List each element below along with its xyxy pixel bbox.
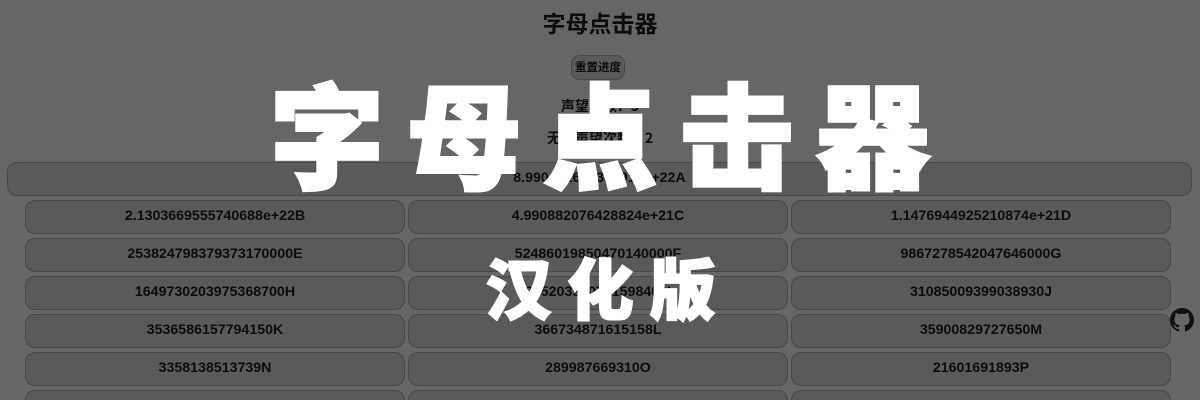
subtitle: 汉化版: 汉 <box>486 238 552 334</box>
letter G button: 9867278542047646000G <box>901 246 1061 262</box>
letter I button <box>408 276 788 310</box>
main title: 字母点击器 <box>270 48 932 213</box>
letter P button <box>791 352 1171 386</box>
partial bottom row button 3 <box>791 390 1171 400</box>
letter K button: 3536586157794150K <box>147 322 283 338</box>
letter P button: 21601691893P <box>933 360 1029 376</box>
letter M button <box>791 314 1171 348</box>
main title: 字母点击器: 字 <box>270 48 384 213</box>
letter I button: 245203950701598400I <box>525 284 671 300</box>
letter D button: 1.1476944925210874e+21D <box>891 208 1071 224</box>
letter M button: 35900829727650M <box>920 322 1042 338</box>
letter H button: 1649730203975368700H <box>135 284 295 300</box>
main title: 字母点击器: 器 <box>816 48 930 213</box>
letter D button <box>791 200 1171 234</box>
letter K button <box>25 314 405 348</box>
letter H button <box>25 276 405 310</box>
letter L button <box>408 314 788 348</box>
letter C button: 4.990882076428824e+21C <box>512 208 684 224</box>
letter N button: 3358138513739N <box>159 360 271 376</box>
letter buttons grid <box>25 200 1171 400</box>
letter F button <box>408 238 788 272</box>
partial bottom row button 2 <box>408 390 788 400</box>
main title: 字母点击器: 点 <box>543 48 657 213</box>
letter J button: 31085009399038930J <box>910 284 1052 300</box>
page heading: 字母点击器 <box>542 5 658 39</box>
letter F button: 52486019850470140000F <box>515 246 681 262</box>
subtitle: 汉化版: 化 <box>568 238 634 334</box>
subtitle: 汉化版: 版 <box>650 238 716 334</box>
main title: 字母点击器: 母 <box>407 48 521 213</box>
letter O button <box>408 352 788 386</box>
letter E button: 253824798379373170000E <box>127 246 303 262</box>
letter C button <box>408 200 788 234</box>
letter O button: 289987669310O <box>545 360 651 376</box>
letter B button: 2.1303669555740688e+22B <box>125 208 305 224</box>
letter E button <box>25 238 405 272</box>
letter J button <box>791 276 1171 310</box>
icon: github <box>1170 308 1194 332</box>
partial bottom row button 1 <box>25 390 405 400</box>
letter L button: 366734871615158L <box>534 322 662 338</box>
reset progress button <box>571 55 625 80</box>
prestige count: 声望次数：5 <box>561 96 639 116</box>
letter G button <box>791 238 1171 272</box>
main title: 字母点击器: 击 <box>680 48 794 213</box>
reset progress button: 重置进度 <box>575 59 621 75</box>
letter A wide button: 8.990471623358914e+22A <box>513 170 686 186</box>
subtitle: 汉化版 <box>486 238 716 334</box>
letter A wide button <box>7 162 1192 196</box>
letter B button <box>25 200 405 234</box>
infinite prestige count: 无限声望次数：2 <box>547 128 653 148</box>
letter N button <box>25 352 405 386</box>
